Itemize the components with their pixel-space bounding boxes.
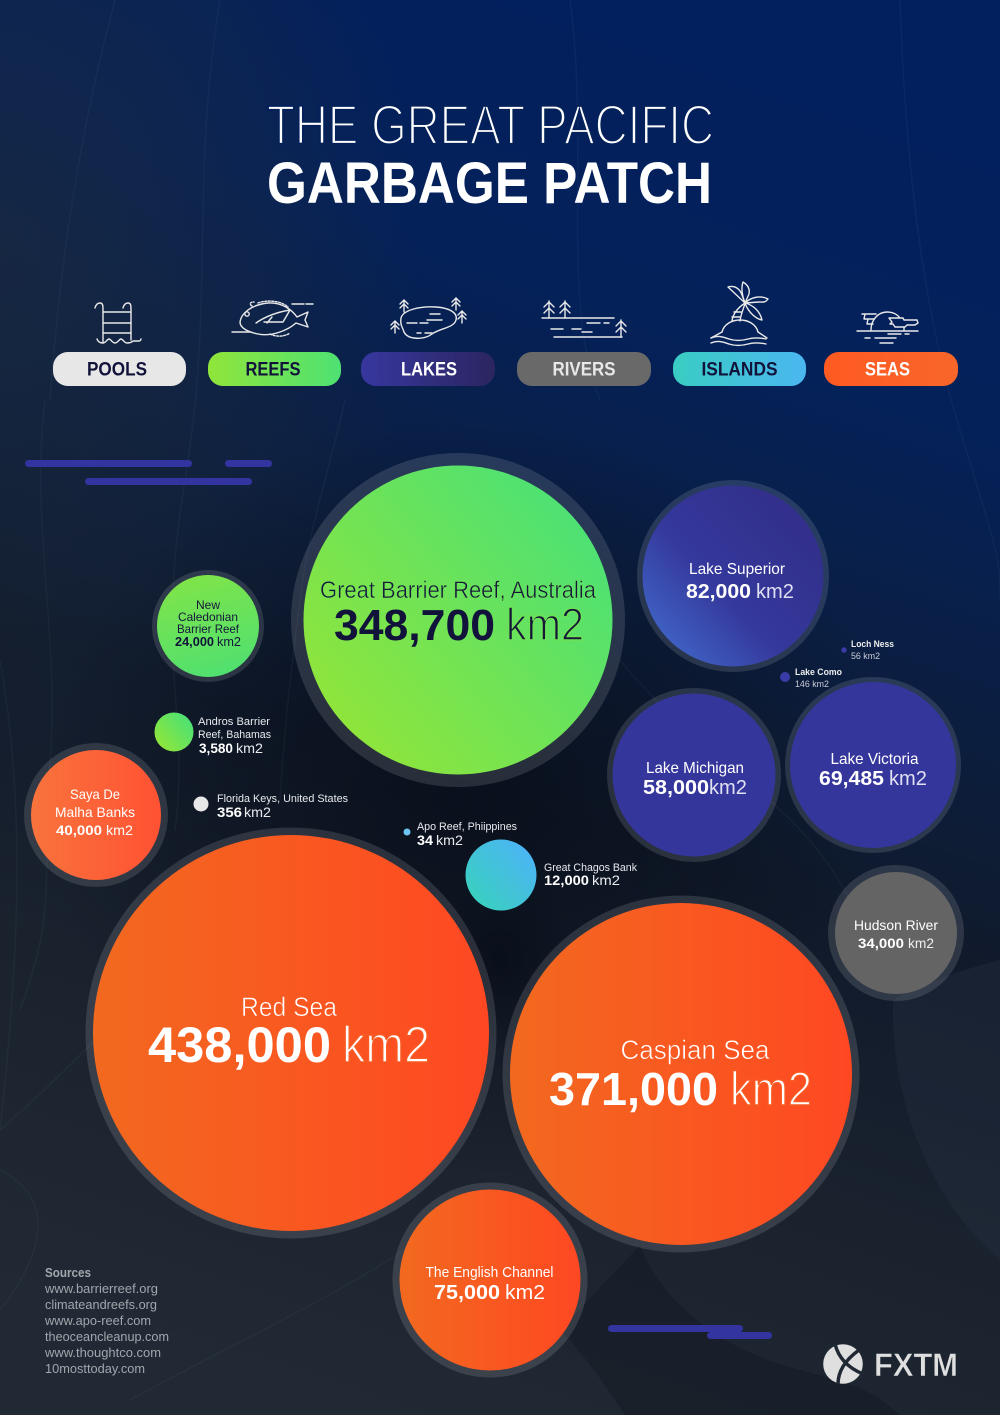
bubble: The English Channel: The English Channel	[426, 1264, 554, 1281]
bubble: New Caledonian Barrier Reef: km2	[217, 635, 241, 649]
category: lakes	[361, 298, 495, 386]
bubble: New Caledonian Barrier Reef: 24,000	[175, 635, 214, 649]
sources: theoceancleanup.com	[45, 1329, 169, 1344]
sources: climateandreefs.org	[45, 1297, 157, 1312]
logo: FXTM: FXTM	[874, 1347, 958, 1383]
bubble: Lake Victoria: km2	[889, 768, 927, 790]
bubble: New Caledonian Barrier Reef: New	[196, 598, 220, 612]
bubble: The English Channel: km2	[505, 1282, 545, 1304]
bubble: Florida Keys	[194, 793, 348, 820]
bubble: Great Chagos Bank: km2	[592, 872, 620, 888]
bubble: Saya De Malha Banks	[24, 743, 168, 887]
bubble: Red Sea: 438,000	[148, 1017, 331, 1073]
bubble: The English Channel: 75,000	[434, 1282, 500, 1304]
bubble: Great Barrier Reef: Great Barrier Reef, Australia	[320, 577, 597, 604]
title: GARBAGE PATCH	[267, 151, 712, 216]
sources: www.barrierreef.org	[44, 1281, 158, 1296]
bubble: Great Barrier Reef	[291, 453, 625, 787]
bubble: Apo Reef	[404, 821, 517, 848]
bubble: Great Barrier Reef: 348,700	[334, 601, 495, 650]
pill: seas: SEAS	[865, 360, 910, 380]
pill: islands: ISLANDS	[702, 360, 778, 380]
icon: palm island	[711, 282, 768, 346]
bubble: Saya De Malha Banks: 40,000	[56, 822, 102, 838]
title	[267, 93, 714, 216]
bubble: Caspian Sea: km2	[730, 1062, 812, 1115]
bubble: Florida Keys: 356	[217, 804, 242, 820]
pill: reefs: REEFS	[246, 360, 300, 380]
bubble: Hudson River: km2	[908, 935, 934, 951]
category: islands	[673, 282, 806, 386]
bubble: Lake Michigan: 58,000	[643, 777, 709, 799]
bubble: Florida Keys: km2	[244, 804, 271, 820]
category: rivers	[517, 301, 651, 386]
bubble: Loch Ness: 56 km2	[851, 651, 880, 661]
bubble: Lake Superior	[637, 480, 829, 672]
bubble: Lake Michigan	[607, 688, 781, 862]
pill: lakes: LAKES	[401, 360, 457, 380]
bubble: Saya De Malha Banks: Malha Banks	[55, 804, 135, 820]
bubble: Lake Como: 146 km2	[795, 679, 829, 689]
bubble: Lake Victoria: 69,485	[819, 768, 884, 790]
sources: Sources	[45, 1265, 91, 1280]
bubble: Hudson River: 34,000	[858, 935, 904, 951]
bubble: Florida Keys: Florida Keys, United States	[217, 793, 348, 805]
bubble: The English Channel	[392, 1182, 588, 1378]
bubble: Red Sea	[86, 828, 496, 1238]
bubble: Andros Barrier Reef: km2	[236, 740, 263, 756]
bubble: Red Sea: Red Sea	[241, 992, 338, 1022]
bubble: New Caledonian Barrier Reef: Caledonian	[178, 610, 238, 624]
decorative dashes bottom	[608, 1325, 772, 1339]
bubble: Lake Como: Lake Como	[795, 667, 842, 677]
bubble: Loch Ness: Loch Ness	[851, 639, 894, 649]
bubble: Caspian Sea	[502, 896, 860, 1252]
pill: pools: POOLS	[87, 360, 147, 380]
bubble: Andros Barrier Reef: 3,580	[199, 740, 233, 756]
bubble: Lake Victoria: Lake Victoria	[830, 751, 919, 768]
category: reefs	[208, 301, 341, 386]
bubble: Loch Ness	[841, 639, 894, 661]
sources	[44, 1265, 169, 1376]
bubble: Lake Superior: 82,000	[686, 581, 751, 603]
bubble: Great Chagos Bank: 12,000	[544, 872, 589, 888]
bubble: Andros Barrier Reef: Reef, Bahamas	[198, 729, 271, 741]
bubble: Andros Barrier Reef	[154, 712, 271, 756]
bubble: Lake Superior: Lake Superior	[689, 561, 786, 578]
bubble: Saya De Malha Banks: Saya De	[70, 786, 120, 802]
decorative dashes top	[25, 460, 272, 485]
bubble: Lake Victoria	[785, 677, 961, 853]
bubble: Great Barrier Reef: km2	[506, 599, 584, 650]
bubble: Apo Reef: Apo Reef, Phiippines	[417, 821, 517, 833]
bubble: Great Chagos Bank: Great Chagos Bank	[544, 862, 637, 874]
bubble: New Caledonian Barrier Reef	[152, 570, 264, 682]
category: pools	[53, 303, 186, 386]
bubble: Hudson River	[828, 865, 964, 1001]
icon: FXTM mark	[823, 1344, 863, 1384]
bubble: Red Sea: km2	[342, 1016, 430, 1073]
bubble: Hudson River: Hudson River	[854, 917, 938, 933]
sources: www.apo-reef.com	[44, 1313, 151, 1328]
icon: sun over sea	[857, 312, 918, 343]
bubble: Andros Barrier Reef: Andros Barrier	[198, 716, 270, 728]
icon: pool ladder	[95, 303, 141, 343]
logo: FXTM	[823, 1344, 958, 1384]
pill: rivers: RIVERS	[552, 360, 616, 380]
bubble: Great Chagos Bank	[466, 840, 637, 910]
icon: lake with trees	[391, 298, 466, 338]
bubble: Caspian Sea: 371,000	[549, 1063, 718, 1115]
icon: fish	[232, 301, 313, 336]
icon: river with trees	[542, 301, 626, 337]
bubble: Saya De Malha Banks: km2	[106, 822, 133, 838]
sources: 10mosttoday.com	[45, 1361, 145, 1376]
bubble: Apo Reef: km2	[436, 832, 463, 848]
bubble: Caspian Sea: Caspian Sea	[620, 1035, 770, 1065]
bubble: Lake Como	[780, 667, 842, 689]
title: THE GREAT PACIFIC	[267, 93, 714, 156]
bubble: Lake Michigan: km2	[709, 777, 747, 799]
bubble: Apo Reef: 34	[417, 832, 433, 848]
sources: www.thoughtco.com	[44, 1345, 161, 1360]
bubble: Lake Michigan: Lake Michigan	[646, 760, 744, 777]
category: seas	[824, 312, 958, 386]
bubble: Lake Superior: km2	[756, 581, 794, 603]
bubble: New Caledonian Barrier Reef: Barrier Reef	[177, 622, 240, 636]
